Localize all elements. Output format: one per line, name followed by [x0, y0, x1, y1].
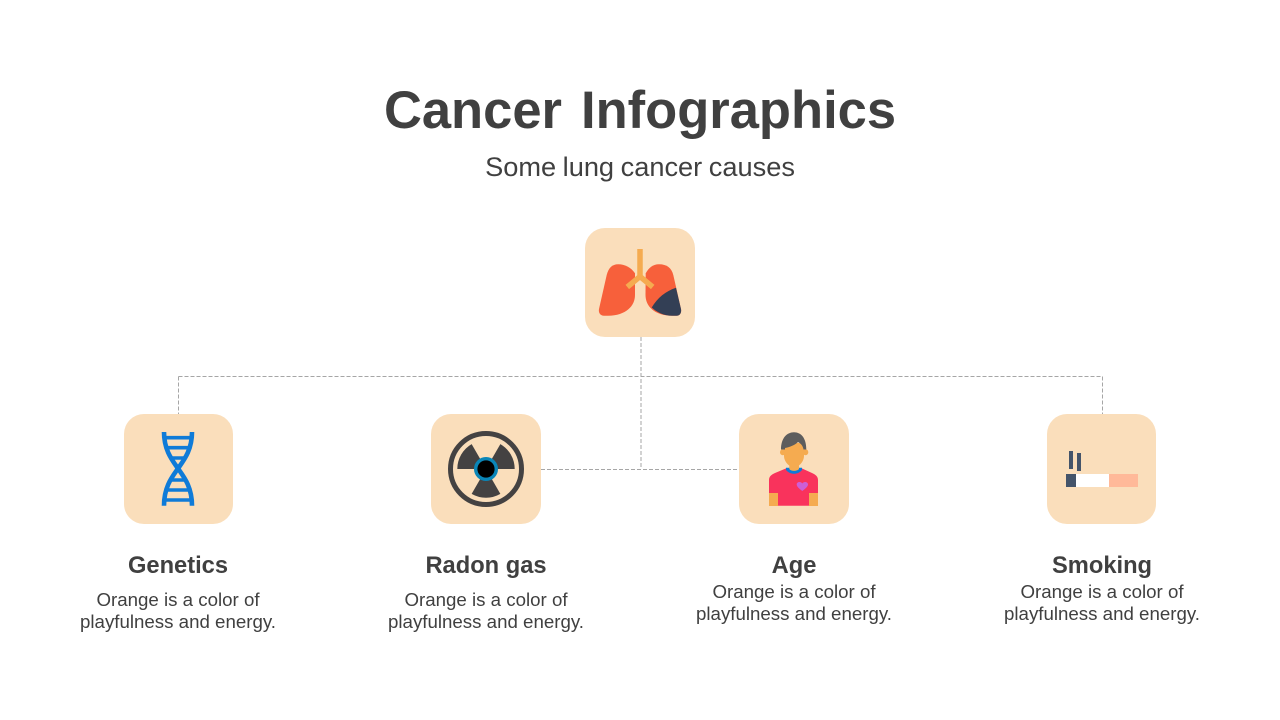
icon: radiation symbol	[431, 414, 541, 524]
description: smoking	[1004, 581, 1200, 624]
icon: lungs	[585, 228, 695, 337]
description: genetics	[80, 589, 276, 632]
description: genetics: Orange is a color of	[96, 589, 260, 610]
description: age: Orange is a color of	[712, 581, 876, 602]
heading: age: Age	[772, 553, 816, 579]
text block: smoking	[1004, 553, 1200, 624]
description: smoking: playfulness and energy.	[1004, 603, 1200, 624]
text block: genetics	[80, 553, 276, 632]
description: radon gas: playfulness and energy.	[388, 611, 584, 632]
description: age	[696, 581, 892, 624]
text block: radon gas	[388, 553, 584, 632]
icon: DNA helix	[124, 414, 233, 524]
heading: smoking: Smoking	[1052, 553, 1152, 579]
text block: age	[696, 553, 892, 624]
title: Cancer Infographics	[384, 81, 896, 140]
description: radon gas: Orange is a color of	[404, 589, 568, 610]
description: genetics: playfulness and energy.	[80, 611, 276, 632]
icon: person	[739, 414, 849, 524]
dashed connectors	[178, 337, 1102, 470]
description: smoking: Orange is a color of	[1020, 581, 1184, 602]
description: age: playfulness and energy.	[696, 603, 892, 624]
heading: genetics: Genetics	[128, 553, 228, 579]
heading: radon gas: Radon gas	[425, 553, 547, 579]
subtitle: Some lung cancer causes	[485, 151, 795, 182]
icon: cigarette	[1047, 414, 1156, 524]
description: radon gas	[388, 589, 584, 632]
